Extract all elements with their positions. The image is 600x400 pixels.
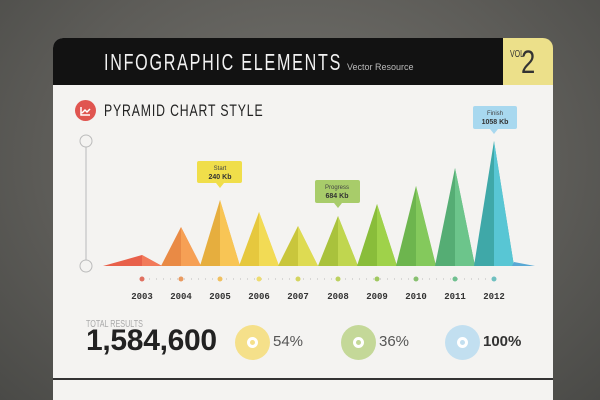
tooltip: progress: 684 Kb	[326, 193, 348, 200]
tooltip: start	[197, 161, 242, 188]
year labels: 2003	[131, 292, 153, 302]
stat: 54%	[235, 325, 303, 360]
stats: total: TOTAL RESULTS	[86, 319, 143, 330]
tooltip: progress: Progress	[325, 185, 349, 191]
section heading	[75, 100, 263, 121]
year labels: 2012	[483, 292, 505, 302]
lower card	[53, 378, 553, 400]
year labels: 2010	[405, 292, 427, 302]
pyramids	[103, 141, 535, 266]
vol badge: 2	[521, 44, 535, 80]
stat: 36%: 36%	[379, 333, 409, 350]
title: Vector Resource	[347, 62, 414, 72]
header bar	[53, 38, 553, 85]
stats: total: 1,584,600	[86, 324, 217, 357]
stat: 100%	[445, 325, 521, 360]
tooltip: finish: Finish	[487, 111, 503, 117]
title: INFOGRAPHIC ELEMENTS	[104, 49, 342, 75]
icon: chart	[75, 100, 96, 121]
tooltip: start: 240 Kb	[209, 174, 231, 181]
timeline dots	[140, 276, 496, 282]
year labels: 2005	[209, 292, 231, 302]
vol badge: VOL	[510, 49, 524, 60]
heading text: PYRAMID CHART STYLE	[104, 101, 263, 120]
year labels: 2004	[170, 292, 192, 302]
card	[53, 38, 553, 378]
year labels: 2007	[287, 292, 309, 302]
stat: 100%: 100%	[483, 333, 521, 350]
tooltip: start: Start	[214, 166, 227, 172]
stat: 54%: 54%	[273, 333, 303, 350]
year labels: 2009	[366, 292, 388, 302]
year labels	[131, 292, 505, 302]
tooltip: finish: 1058 Kb	[482, 119, 508, 126]
axis	[80, 135, 92, 272]
year labels: 2011	[444, 292, 466, 302]
year labels: 2008	[327, 292, 349, 302]
year labels: 2006	[248, 292, 270, 302]
tooltip: progress	[315, 180, 360, 208]
vol badge	[503, 38, 553, 85]
stat: 36%	[341, 325, 409, 360]
tooltip: finish	[473, 106, 517, 134]
